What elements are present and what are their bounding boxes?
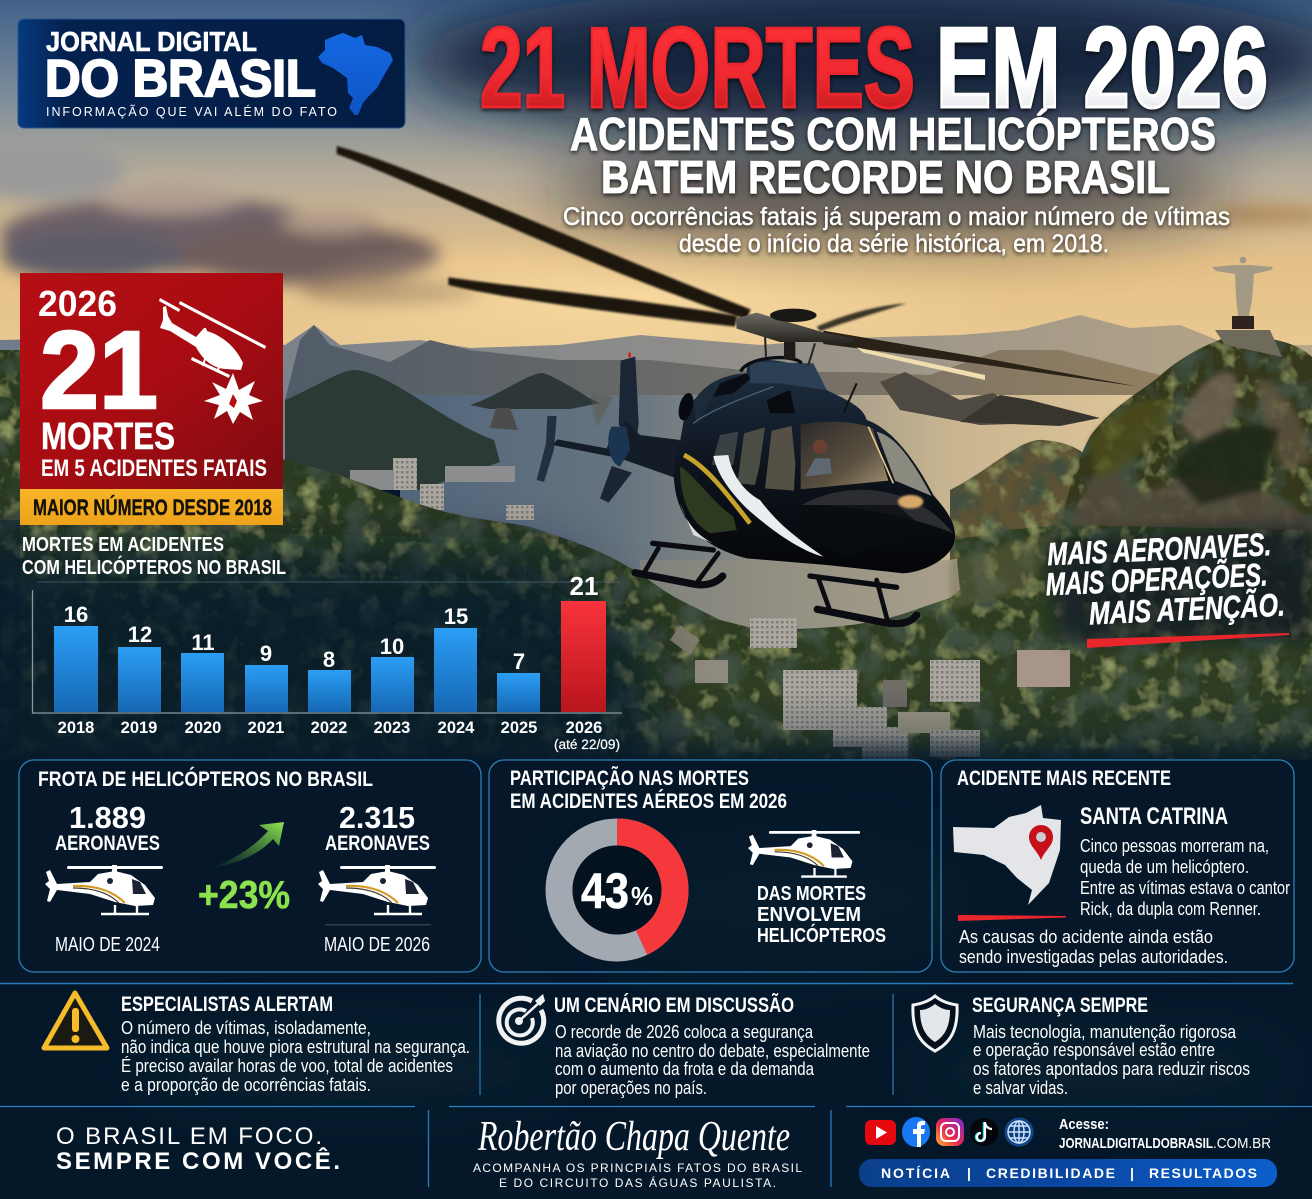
subtitle <box>570 108 1216 203</box>
chart heading <box>22 534 286 579</box>
big number: 21 <box>40 309 158 432</box>
donut label: HELICÓPTEROS <box>757 923 886 947</box>
mast and rotor head <box>736 309 853 365</box>
block text: Mais tecnologia, manutenção rigorosa <box>973 1022 1237 1042</box>
website link: .COM.BR <box>1213 1135 1271 1152</box>
panel: most recent accident <box>941 760 1294 972</box>
subtitle: ACIDENTES COM HELICÓPTEROS <box>570 108 1216 160</box>
highlight strip: MAIOR NÚMERO DESDE 2018 <box>33 495 272 520</box>
block title: UM CENÁRIO EM DISCUSSÃO <box>554 994 794 1017</box>
block text: não indica que houve piora estrutural na segurança. <box>121 1037 470 1057</box>
rotor blades <box>337 146 1138 387</box>
bar chart: deaths per year: 2022 <box>311 719 347 737</box>
values pill: NOTÍCIA <box>881 1165 950 1181</box>
bar chart: deaths per year: 2019 <box>121 719 157 737</box>
red underline <box>958 915 1066 921</box>
growth percent: +23% <box>198 874 290 917</box>
icon: Facebook <box>902 1117 930 1147</box>
city buildings <box>670 618 1070 760</box>
fuselage <box>674 360 955 573</box>
website link: JORNALDIGITALDOBRASIL <box>1059 1135 1213 1152</box>
icon: helicopter <box>748 830 860 877</box>
icon: YouTube <box>865 1120 896 1145</box>
bar chart: deaths per year: 2024 <box>438 719 475 737</box>
panel title <box>510 767 787 813</box>
bar chart: deaths per year: 2025 <box>501 719 537 737</box>
bar chart: deaths per year: 2020 <box>185 719 221 737</box>
label: mortes: MORTES <box>41 416 175 458</box>
donut label: ENVOLVEM <box>757 904 861 926</box>
investigation note: As causas do acidente ainda estão <box>959 927 1213 947</box>
panel: share of deaths <box>489 760 932 972</box>
slogan red underline <box>1087 633 1289 648</box>
fleet 2024: 1.889 <box>69 800 146 835</box>
fleet 2026 <box>318 800 436 956</box>
icon: explosion <box>204 373 263 424</box>
investigation note: sendo investigadas pelas autoridades. <box>959 947 1228 967</box>
far mountains <box>0 315 1312 460</box>
block: experts warn <box>44 993 470 1095</box>
bar chart: deaths per year: 10 <box>380 634 404 659</box>
bay water <box>400 395 1160 585</box>
block text <box>121 1018 470 1095</box>
bar chart: deaths per year: 2021 <box>248 719 284 737</box>
intro paragraph <box>563 203 1230 258</box>
bar chart: deaths per year: 2026 <box>566 719 602 737</box>
icon: globe <box>1006 1118 1032 1146</box>
footer dividers <box>0 1106 1312 1187</box>
icon: warning triangle <box>44 993 107 1048</box>
accident description: queda de um helicóptero. <box>1080 857 1249 877</box>
footer slogan: O BRASIL EM FOCO. <box>56 1123 322 1150</box>
Christ the Redeemer statue <box>1212 257 1282 357</box>
helicopter <box>337 146 1138 624</box>
website link <box>1059 1116 1271 1152</box>
website link: Acesse: <box>1059 1116 1109 1133</box>
donut chart 43%: % <box>631 881 653 911</box>
icon: falling helicopter <box>159 298 266 378</box>
icon: shield <box>913 996 957 1051</box>
block title: ESPECIALISTAS ALERTAM <box>121 993 333 1016</box>
year: 2026 <box>38 283 117 324</box>
main title: 21 MORTES <box>480 5 915 132</box>
bar chart: deaths per year: 2018 <box>58 719 94 737</box>
bar chart: deaths per year: 8 <box>323 647 335 672</box>
bar chart: deaths per year: (até 22/09) <box>554 737 620 752</box>
accident description <box>1080 836 1290 919</box>
cabin windows <box>712 422 932 496</box>
fleet 2024: AERONAVES <box>55 832 160 855</box>
logo: Jornal Digital do Brasil <box>18 19 405 128</box>
signature caption <box>473 1161 802 1190</box>
chart heading: MORTES EM ACIDENTES <box>22 534 224 556</box>
fleet 2026: MAIO DE 2026 <box>324 934 430 956</box>
panel title: EM ACIDENTES AÉREOS EM 2026 <box>510 790 787 813</box>
intro paragraph: desde o início da série histórica, em 2018. <box>679 230 1109 258</box>
block text: com o aumento da frota e da demanda <box>555 1059 815 1079</box>
values pill: RESULTADOS <box>1149 1165 1257 1181</box>
block: scenario under discussion <box>499 994 870 1098</box>
bar chart: deaths per year: 12 <box>128 622 152 647</box>
block text: na aviação no centro do debate, especialmente <box>555 1041 870 1061</box>
accident description: Rick, da dupla com Renner. <box>1080 899 1261 919</box>
icon: Brazil map <box>318 33 393 115</box>
icon: growth arrow <box>210 822 284 868</box>
white and gold stripe <box>680 455 823 557</box>
chart heading: COM HELICÓPTEROS NO BRASIL <box>22 555 286 579</box>
donut label <box>757 883 886 947</box>
donut chart 43% <box>559 832 675 948</box>
fleet 2026: 2.315 <box>339 800 415 835</box>
block text <box>555 1022 870 1098</box>
block title: SEGURANÇA SEMPRE <box>972 994 1148 1017</box>
accident location: SANTA CATRINA <box>1080 803 1228 830</box>
bar chart: deaths per year: 15 <box>444 604 468 629</box>
block text: O recorde de 2026 coloca a segurança <box>555 1022 814 1042</box>
bar chart: deaths per year: 9 <box>260 641 272 666</box>
engine cowling detail <box>676 358 857 423</box>
icon: target <box>499 994 545 1043</box>
overlays <box>0 545 650 790</box>
values pill <box>859 1159 1277 1187</box>
donut label: DAS MORTES <box>757 883 866 905</box>
icon: Instagram <box>936 1118 964 1146</box>
block text: e salvar vidas. <box>973 1078 1068 1098</box>
Corcovado <box>1000 337 1312 760</box>
panel title: PARTICIPAÇÃO NAS MORTES <box>510 767 749 790</box>
investigation note <box>959 927 1228 967</box>
logo line 2: DO BRASIL <box>45 50 316 108</box>
block text: por operações no país. <box>555 1078 707 1098</box>
bar chart: deaths per year <box>32 571 622 752</box>
footer slogan: SEMPRE COM VOCÊ. <box>56 1147 340 1175</box>
coastal city <box>330 458 534 526</box>
intro paragraph: Cinco ocorrências fatais já superam o maior número de vítimas <box>563 203 1230 231</box>
label: accidents: EM 5 ACIDENTES FATAIS <box>41 455 267 482</box>
fleet 2024: MAIO DE 2024 <box>55 934 160 956</box>
signature caption: E DO CIRCUITO DAS ÁGUAS PAULISTA. <box>499 1175 776 1190</box>
bar chart: deaths per year: 16 <box>64 602 88 627</box>
bar chart: deaths per year: 2023 <box>374 719 410 737</box>
block text: e operação responsável estão entre <box>973 1040 1215 1060</box>
bar chart: deaths per year: 21 <box>570 571 598 601</box>
block text <box>973 1022 1250 1098</box>
block text: É preciso availar horas de voo, total de acidentes <box>121 1056 453 1076</box>
values pill: | <box>967 1165 971 1181</box>
nose highlights <box>802 490 953 557</box>
footer slogan <box>56 1123 340 1175</box>
values pill: | <box>1130 1165 1134 1181</box>
landing skids <box>635 543 917 624</box>
tail section <box>537 353 680 503</box>
left forest <box>0 350 800 770</box>
social icons <box>865 1117 1032 1147</box>
fleet 2024 <box>45 800 163 956</box>
panel: 21 deaths red card <box>20 273 283 525</box>
donut chart 43%: 43 <box>581 863 629 919</box>
slogan <box>1043 526 1286 633</box>
signature caption: ACOMPANHA OS PRINCPIAIS FATOS DO BRASIL <box>473 1161 802 1175</box>
bar chart: deaths per year: 7 <box>513 649 525 674</box>
bar chart: deaths per year: 11 <box>191 630 215 655</box>
panel title: FROTA DE HELICÓPTEROS NO BRASIL <box>38 767 373 791</box>
icon: map pin <box>1029 825 1053 860</box>
logo tagline: INFORMAÇÃO QUE VAI ALÉM DO FATO <box>46 104 337 119</box>
right hills <box>950 440 1090 560</box>
block text: O número de vítimas, isoladamente, <box>121 1018 371 1038</box>
values pill: CREDIBILIDADE <box>986 1165 1115 1181</box>
logo line 1: JORNAL DIGITAL <box>46 26 257 57</box>
map: Santa Catarina <box>953 805 1061 905</box>
footer signature block <box>473 1114 802 1190</box>
panel: helicopter fleet <box>19 760 481 972</box>
block: safety always <box>913 994 1250 1098</box>
section divider <box>0 982 1293 984</box>
subtitle: BATEM RECORDE NO BRASIL <box>601 151 1170 203</box>
block text: os fatores apontados para reduzir riscos <box>973 1059 1250 1079</box>
icon: TikTok <box>970 1118 998 1146</box>
block text: e a proporção de ocorrências fatais. <box>121 1075 371 1095</box>
accident description: Cinco pessoas morreram na, <box>1080 836 1269 856</box>
panel title: ACIDENTE MAIS RECENTE <box>957 767 1171 790</box>
lower right vegetation <box>640 525 1312 770</box>
signature: Robertão Chapa Quente <box>477 1114 790 1160</box>
fleet 2026: AERONAVES <box>325 832 430 855</box>
